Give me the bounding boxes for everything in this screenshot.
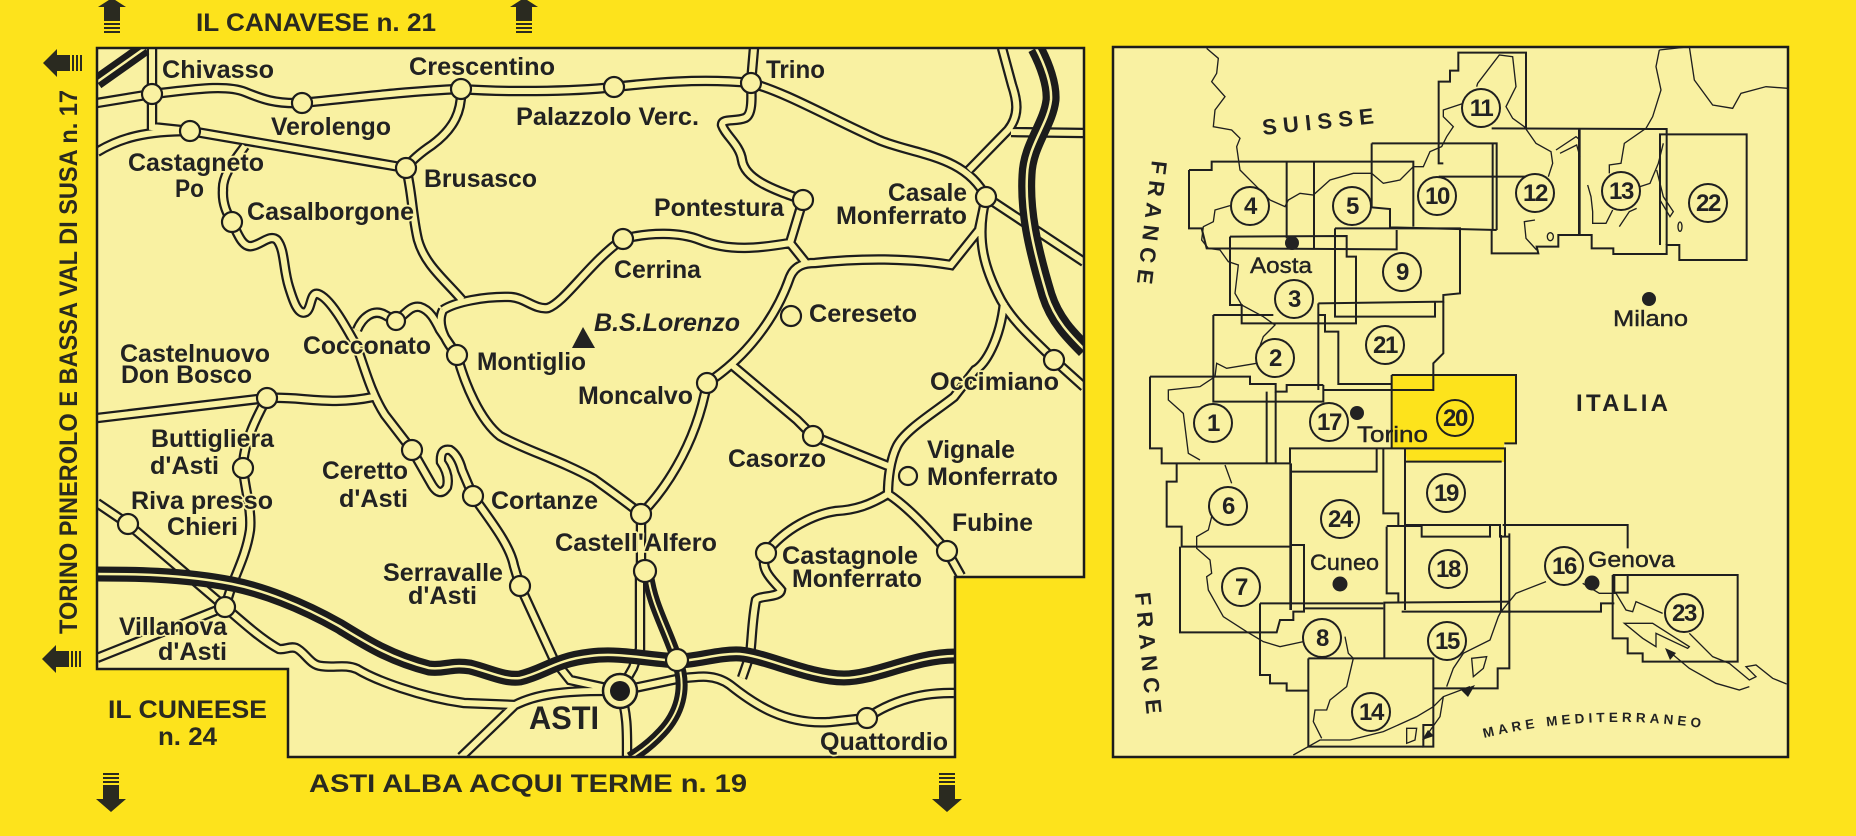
heading: south-west neighbouring sheet: n. 24 [158,723,217,751]
numbered sheet circles [1194,89,1727,731]
town labels: Serravalle [383,559,503,587]
place and country labels: SUISSE [1261,103,1375,140]
sheet numbers: 10 [1425,183,1450,210]
town labels: Cortanze [491,487,598,515]
icon: arrow left bottom [42,645,81,673]
town labels: Po [175,175,204,203]
icon: Asti city marker [603,674,637,708]
town labels: ASTI [529,700,599,736]
sheet numbers: 18 [1436,556,1461,583]
heading: west neighbouring sheet: TORINO PINEROLO E BASSA VAL DI SUSA n. 17 [55,90,83,634]
town labels: Riva presso [131,487,273,515]
town labels: B.S.Lorenzo [594,309,740,337]
town nodes [118,73,1064,728]
town labels: Villanova [119,613,228,641]
icon: arrow up right [510,0,538,33]
road network [97,48,1085,758]
place and country labels: FRANCE [1130,591,1167,715]
place and country labels [1130,103,1700,738]
town labels: Cerrina [614,256,702,284]
panel outline [97,48,1084,757]
town labels: Pontestura [654,194,785,222]
icon: arrow left top [43,49,82,77]
town labels: Don Bosco [121,361,252,389]
sheet numbers: 1 [1207,410,1220,437]
town labels: Castelnuovo [120,340,270,368]
town labels: Verolengo [271,113,391,141]
city dots [1285,236,1656,592]
heading: south-west neighbouring sheet: IL CUNEESE [108,696,267,724]
town labels: Castagnole [782,542,918,570]
place and country labels: MARE MEDITERRANEO [1482,712,1700,738]
borders and coastline [1168,47,1788,755]
icon: mountain triangle [572,327,595,348]
town labels: d'Asti [408,582,477,610]
town labels: Casorzo [728,445,826,473]
place and country labels: FRANCE [1132,159,1172,286]
sheet outlines [1150,53,1747,747]
town labels: Quattordio [820,728,948,756]
town labels: d'Asti [158,638,227,666]
sheet numbers: 7 [1235,574,1248,601]
place and country labels: ITALIA [1576,390,1668,417]
town labels: Chieri [167,513,238,541]
sheet numbers: 24 [1328,506,1354,533]
sheet numbers: 5 [1346,193,1359,220]
sheet numbers: 15 [1435,628,1460,655]
icon: small coastal arrows [1422,648,1676,740]
place and country labels: Milano [1613,306,1688,331]
place and country labels: Genova [1588,547,1676,572]
sheet numbers: 19 [1434,480,1459,507]
sheet numbers: 20 [1443,405,1468,432]
town labels: Cocconato [303,332,431,360]
town labels: d'Asti [150,452,219,480]
town labels: Castagneto [128,149,264,177]
town labels: Fubine [952,509,1033,537]
panel: road map of Asti and Monferrato [97,48,1085,758]
town labels: Chivasso [162,56,274,84]
town labels: d'Asti [339,485,408,513]
sheet numbers [1207,95,1721,726]
town labels: Montiglio [477,348,586,376]
town labels: Moncalvo [578,382,693,410]
sheet numbers: 6 [1222,493,1235,520]
town labels: Cereseto [809,300,917,328]
icon: arrow up left [98,0,126,33]
sheet numbers: 11 [1470,95,1493,122]
town labels: Brusasco [424,165,537,193]
sheet numbers: 23 [1672,600,1697,627]
highlighted sheet 20 [1392,375,1516,462]
town labels: Buttigliera [151,425,275,453]
sheet numbers: 13 [1609,178,1634,205]
town labels: Casale [888,179,967,207]
icon: arrow down right [932,773,962,812]
place and country labels: Aosta [1250,253,1313,278]
town labels: Castell'Alfero [555,529,717,557]
town labels [119,53,1059,756]
heading: south neighbouring sheet: ASTI ALBA ACQUI TERME n. 19 [309,770,747,798]
sheet numbers: 12 [1523,180,1548,207]
town labels: Vignale [927,436,1015,464]
sheet numbers: 3 [1288,286,1301,313]
town labels: Occimiano [930,368,1059,396]
town labels: Monferrato [792,565,922,593]
heading: north neighbouring sheet: IL CANAVESE n. 21 [196,9,436,37]
sheet numbers: 22 [1696,190,1721,217]
sheet numbers: 21 [1373,332,1398,359]
town labels: Monferrato [836,202,967,230]
icon: arrow down left [96,773,126,812]
town labels: Monferrato [927,463,1058,491]
heading: south-west neighbouring sheet [108,696,267,751]
town labels: Casalborgone [247,198,414,226]
sheet numbers: 4 [1244,193,1258,220]
place and country labels: Torino [1357,422,1428,447]
town labels: Crescentino [409,53,555,81]
sheet numbers: 9 [1396,259,1409,286]
sheet numbers: 17 [1317,409,1342,436]
town labels: Trino [766,56,825,84]
sheet numbers: 2 [1269,345,1282,372]
sheet numbers: 16 [1552,553,1577,580]
town labels: Palazzolo Verc. [516,103,699,131]
place and country labels: Cuneo [1310,550,1379,575]
panel: sheet index map [1112,46,1790,758]
sheet numbers: 14 [1359,699,1385,726]
town labels: Ceretto [322,457,408,485]
sheet numbers: 8 [1316,625,1329,652]
